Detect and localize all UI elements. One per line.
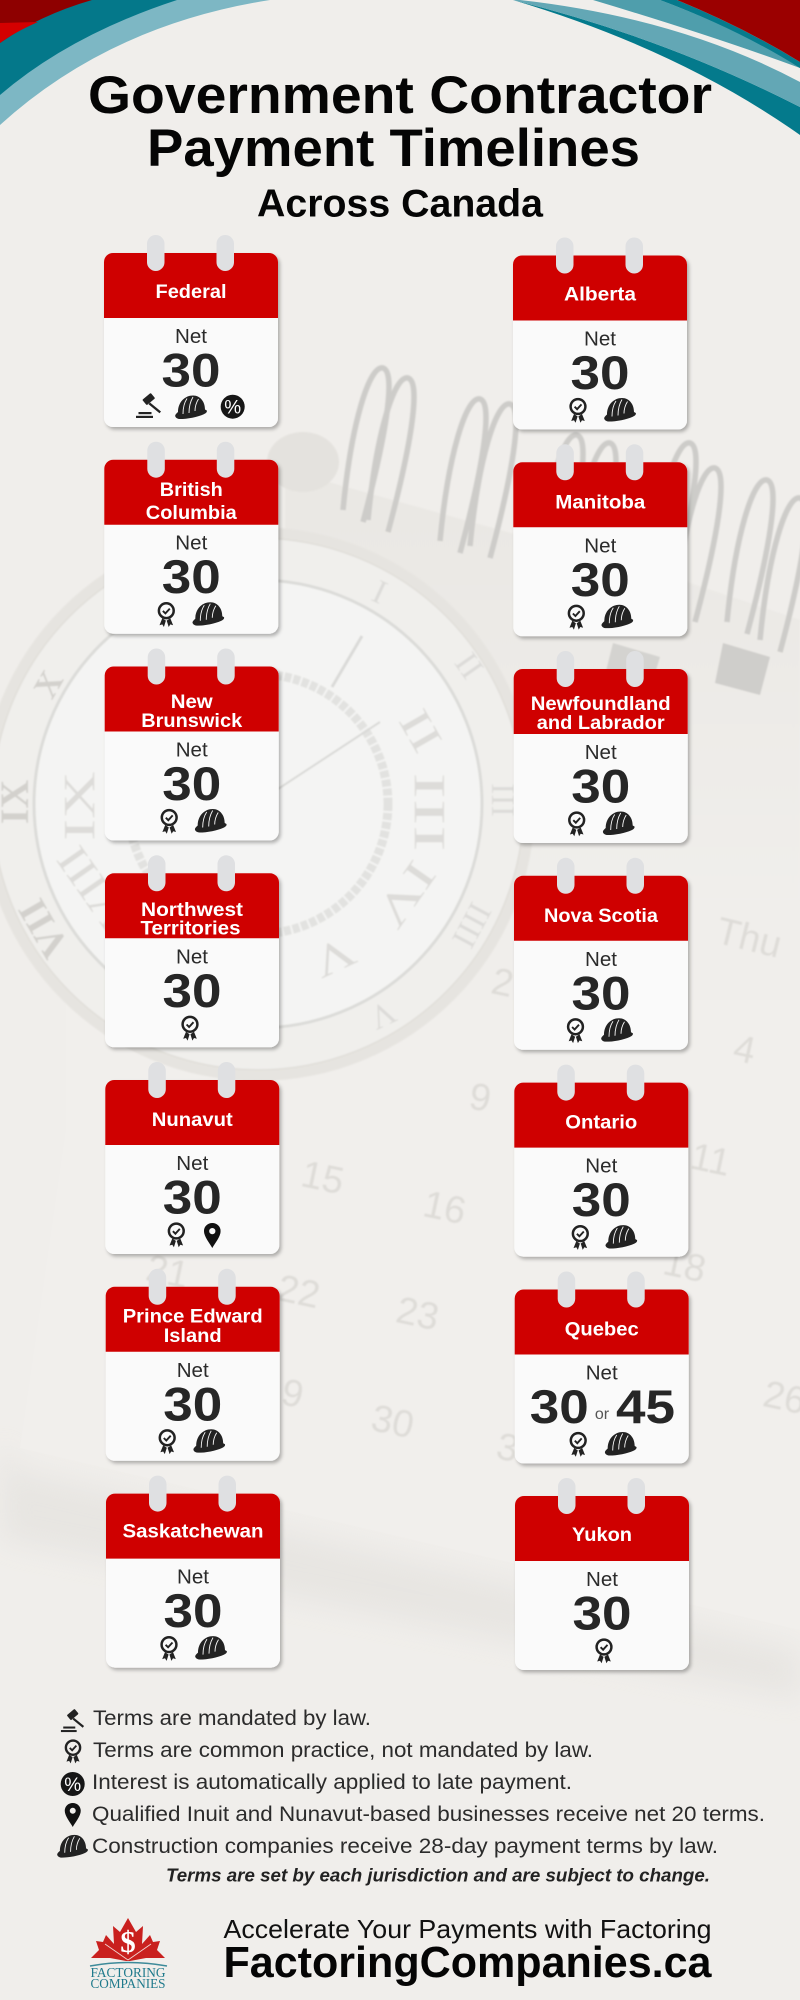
title: Government Contractor xyxy=(88,66,712,125)
calendar numbers: 22 xyxy=(273,1267,324,1317)
card: Quebec: Net xyxy=(586,1362,618,1384)
card: New Brunswick: Brunswick xyxy=(141,710,242,732)
pocket watch: IV xyxy=(366,852,445,937)
card: Quebec xyxy=(515,1272,689,1464)
card: Federal: Net xyxy=(175,325,207,348)
legend xyxy=(57,1706,765,1858)
card: British Columbia: British xyxy=(160,479,223,501)
card: Nova Scotia: Net xyxy=(585,948,617,971)
pocket watch xyxy=(0,527,535,1081)
logo: Factoring Companies xyxy=(90,1918,167,1992)
pocket watch: I xyxy=(366,573,392,612)
card: Prince Edward Island: 30 xyxy=(163,1378,222,1431)
card: Quebec: Quebec xyxy=(565,1318,639,1340)
card: Nunavut: 30 xyxy=(163,1172,222,1224)
calendar numbers: 2 xyxy=(488,961,517,1006)
card: Nova Scotia xyxy=(514,858,688,1050)
card: Quebec: 45 xyxy=(616,1381,675,1434)
card: Nova Scotia: Nova Scotia xyxy=(544,905,658,927)
call to action: Accelerate Your Payments with Factoring xyxy=(224,1914,712,1944)
card: Nova Scotia: 30 xyxy=(572,967,630,1020)
card: Ontario xyxy=(514,1065,688,1257)
calendar numbers: 18 xyxy=(659,1241,710,1291)
calendar numbers: 16 xyxy=(419,1183,470,1233)
pocket watch: III xyxy=(484,783,521,817)
card: Quebec: 30 xyxy=(530,1381,589,1434)
calendar numbers: 30 xyxy=(367,1397,418,1447)
card: Nunavut xyxy=(105,1062,279,1254)
card: Alberta xyxy=(513,238,687,430)
card: Northwest Territories xyxy=(105,855,279,1047)
calendar numbers: Thu xyxy=(712,910,786,967)
card: Yukon xyxy=(515,1478,689,1670)
card: Saskatchewan: Net xyxy=(177,1566,209,1589)
card: Yukon: Net xyxy=(586,1568,618,1591)
calendar numbers: 21 xyxy=(142,1247,193,1297)
card: Federal: Federal xyxy=(156,281,226,303)
card: New Brunswick: 30 xyxy=(162,758,221,811)
card: Alberta: Alberta xyxy=(564,284,636,306)
title xyxy=(88,66,712,178)
card: Prince Edward Island xyxy=(106,1269,280,1461)
card: Northwest Territories: Northwest xyxy=(141,899,244,921)
card: Newfoundland and Labrador xyxy=(514,651,688,843)
pocket watch: II xyxy=(447,646,490,686)
calendar numbers: 23 xyxy=(392,1289,443,1339)
pocket watch: X xyxy=(27,664,71,705)
calendar numbers: 9 xyxy=(278,1372,307,1417)
card: British Columbia xyxy=(104,442,278,634)
disclaimer: Terms are set by each jurisdiction and are subject to change. xyxy=(166,1866,710,1886)
card: Newfoundland and Labrador: and Labrador xyxy=(537,712,665,734)
pocket watch: IX xyxy=(56,771,104,841)
calendar numbers: 4 xyxy=(730,1028,759,1073)
calendar numbers: 15 xyxy=(297,1153,348,1203)
calendar numbers: 9 xyxy=(466,1076,494,1121)
card: New Brunswick xyxy=(105,648,279,840)
card: Prince Edward Island: Island xyxy=(164,1325,222,1347)
card: New Brunswick: Net xyxy=(176,738,208,762)
logo: Factoring Companies: $ xyxy=(120,1924,136,1959)
pocket watch: VII xyxy=(9,892,78,966)
card: Newfoundland and Labrador: Newfoundland xyxy=(531,693,671,715)
subtitle: Across Canada xyxy=(257,182,544,226)
card: Northwest Territories: 30 xyxy=(162,965,222,1018)
card: Saskatchewan xyxy=(106,1476,280,1668)
legend item: Nunavut businesses: Qualified Inuit and Nunavut-based businesses receive net 20 terms. xyxy=(92,1802,765,1826)
card: Alberta: Net xyxy=(584,328,616,350)
legend item: interest: % xyxy=(64,1775,81,1796)
calendar numbers: 3 xyxy=(493,1426,522,1471)
calendar numbers xyxy=(142,910,800,1471)
card: Quebec: or xyxy=(595,1406,610,1423)
logo: Factoring Companies: FACTORING xyxy=(90,1966,166,1981)
card: Federal: 30 xyxy=(162,344,220,398)
legend item: mandated by law: Terms are mandated by law. xyxy=(93,1706,371,1730)
call to action: FactoringCompanies.ca xyxy=(224,1939,712,1987)
pocket watch: VIII xyxy=(47,837,139,940)
pocket watch: V xyxy=(305,926,363,987)
card: Prince Edward Island: Prince Edward xyxy=(123,1305,263,1327)
card: Saskatchewan: 30 xyxy=(164,1585,222,1638)
legend item: common practice: Terms are common practice, not mandated by law. xyxy=(93,1738,593,1762)
top left swoosh xyxy=(0,0,270,125)
card: Ontario: 30 xyxy=(572,1174,631,1227)
card: Northwest Territories: Net xyxy=(176,945,208,968)
card: Ontario: Ontario xyxy=(565,1112,637,1134)
top right swoosh xyxy=(513,0,800,135)
card: Federal xyxy=(104,235,278,427)
legend item: construction: Construction companies receive 28-day payment terms by law. xyxy=(92,1834,718,1858)
card: British Columbia: 30 xyxy=(162,551,221,604)
card: Federal: % xyxy=(224,398,241,418)
card: Nunavut: Net xyxy=(176,1152,209,1175)
card: Ontario: Net xyxy=(585,1155,618,1178)
calendar paper with shadow xyxy=(0,1000,800,1700)
pocket watch: V xyxy=(363,993,401,1037)
card: Manitoba: Manitoba xyxy=(555,491,645,513)
card: Prince Edward Island: Net xyxy=(177,1359,209,1382)
card: New Brunswick: New xyxy=(171,691,214,713)
card: Nunavut: Nunavut xyxy=(152,1109,233,1131)
card: Newfoundland and Labrador: 30 xyxy=(571,760,630,814)
pocket watch: IIII xyxy=(444,896,498,954)
card: Manitoba: Net xyxy=(584,534,617,557)
card: Saskatchewan: Saskatchewan xyxy=(122,1521,264,1543)
card: Manitoba xyxy=(513,444,687,636)
title: Payment Timelines xyxy=(147,119,640,178)
card: Yukon: Yukon xyxy=(572,1524,632,1546)
pocket watch: III xyxy=(405,772,454,852)
logo: Factoring Companies: COMPANIES xyxy=(90,1977,166,1992)
card: Yukon: 30 xyxy=(572,1588,632,1640)
card: British Columbia: Net xyxy=(175,532,208,555)
pocket watch: II xyxy=(389,701,452,761)
card: British Columbia: Columbia xyxy=(146,502,237,524)
calendar numbers: 11 xyxy=(687,1136,734,1185)
notebook page and spiral coils xyxy=(267,368,800,900)
card: Alberta: 30 xyxy=(570,347,630,400)
card: Newfoundland and Labrador: Net xyxy=(585,741,617,764)
legend item: interest: Interest is automatically applied to late payment. xyxy=(92,1770,572,1794)
call to action xyxy=(224,1914,712,1987)
card: Manitoba: 30 xyxy=(571,554,630,607)
card: Northwest Territories: Territories xyxy=(140,917,241,939)
